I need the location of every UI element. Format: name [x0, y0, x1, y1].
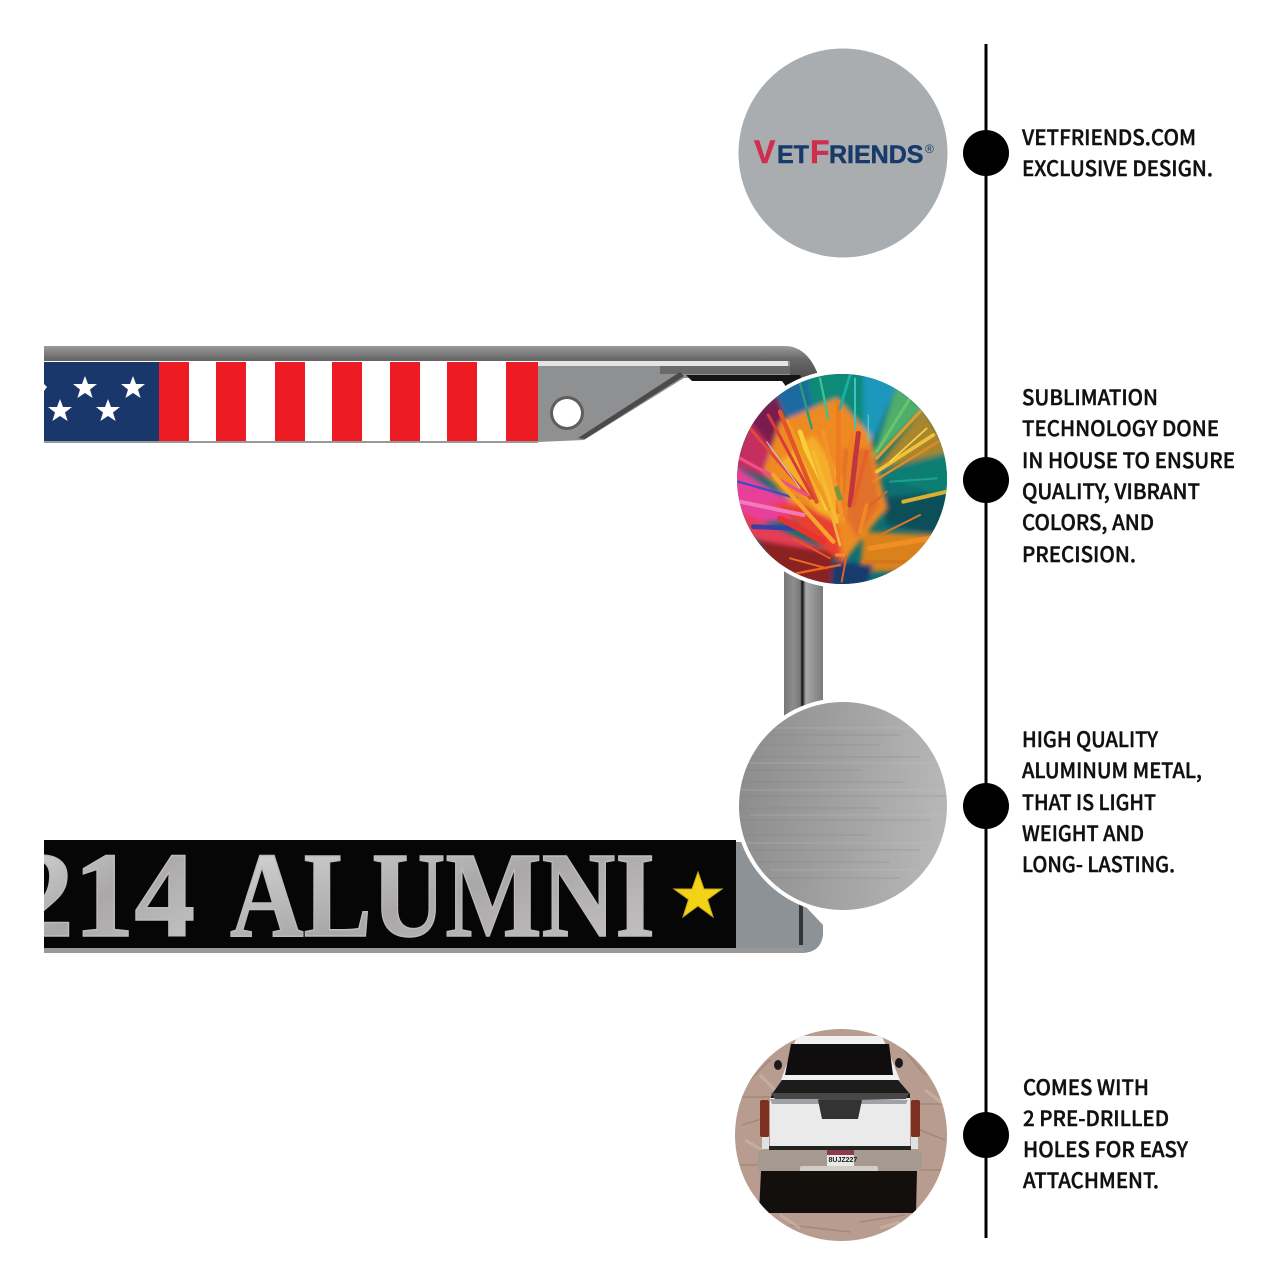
circle: color burst	[737, 372, 947, 586]
frame metal top bar	[44, 346, 822, 390]
logo wordmark: ET	[777, 141, 809, 169]
timeline dot 2	[963, 457, 1009, 503]
feature 1: VetFriends	[738, 48, 1213, 258]
panel text: 214 ALUMNI	[44, 854, 652, 938]
feature 3: aluminum	[735, 698, 1202, 914]
panel text: 214 ALUMNI: ALUMNI	[230, 828, 655, 963]
text: sublimation technology: TECHNOLOGY DONE	[1022, 413, 1219, 443]
frame upper right bracket	[538, 361, 806, 442]
text: sublimation technology: QUALITY, VIBRANT	[1022, 476, 1200, 506]
timeline dot 3	[963, 783, 1009, 829]
text: sublimation technology: PRECISION.	[1022, 539, 1136, 569]
circle: truck rear photo	[735, 1029, 950, 1241]
logo wordmark: RIENDS	[829, 141, 923, 169]
flag canton	[44, 362, 159, 441]
gold star	[674, 872, 722, 917]
ground texture	[735, 1045, 950, 1232]
text: exclusive design: EXCLUSIVE DESIGN.	[1022, 153, 1213, 183]
text: sublimation technology: SUBLIMATION	[1022, 382, 1158, 412]
flag stripes	[159, 362, 538, 441]
text: high quality aluminum	[1022, 724, 1202, 879]
text: high quality aluminum: WEIGHT AND	[1022, 818, 1144, 848]
circle: brushed aluminum	[735, 698, 951, 914]
text: sublimation technology: IN HOUSE TO ENSURE	[1022, 445, 1235, 475]
feature 2: sublimation	[730, 365, 1235, 592]
text: pre-drilled holes	[1023, 1072, 1188, 1195]
text: high quality aluminum: HIGH QUALITY	[1022, 724, 1158, 754]
logo wordmark: F	[810, 134, 830, 170]
text: pre-drilled holes: HOLES FOR EASY	[1023, 1134, 1188, 1164]
logo wordmark: V	[754, 134, 776, 170]
text: high quality aluminum: ALUMINUM METAL,	[1022, 755, 1202, 785]
feature 4: pre-drilled holes	[735, 1029, 1188, 1241]
circle: VetFriends logo	[738, 48, 948, 258]
black plate panel	[44, 840, 736, 948]
text: pre-drilled holes: ATTACHMENT.	[1023, 1165, 1159, 1195]
frame lower right corner	[730, 842, 823, 953]
flag stars	[44, 376, 145, 421]
text: exclusive design: VETFRIENDS.COM	[1021, 122, 1196, 152]
timeline dot 4	[963, 1112, 1009, 1158]
logo wordmark: ®	[925, 142, 934, 156]
text: exclusive design	[1021, 122, 1213, 183]
timeline dot 1	[963, 130, 1009, 176]
license plate frame	[13, 346, 823, 963]
text: pre-drilled holes: 2 PRE-DRILLED	[1023, 1103, 1169, 1133]
timeline line	[984, 44, 988, 1238]
text: high quality aluminum: THAT IS LIGHT	[1022, 787, 1156, 817]
frame right post	[784, 570, 823, 730]
text: sublimation technology: COLORS, AND	[1022, 507, 1154, 537]
panel text: 214 ALUMNI: 214	[13, 828, 195, 963]
text: sublimation technology	[1022, 382, 1235, 569]
flag panel	[44, 361, 538, 443]
plate text on truck: 8UJZ227	[828, 1157, 857, 1164]
text: high quality aluminum: LONG- LASTING.	[1022, 849, 1175, 879]
text: pre-drilled holes: COMES WITH	[1023, 1072, 1149, 1102]
